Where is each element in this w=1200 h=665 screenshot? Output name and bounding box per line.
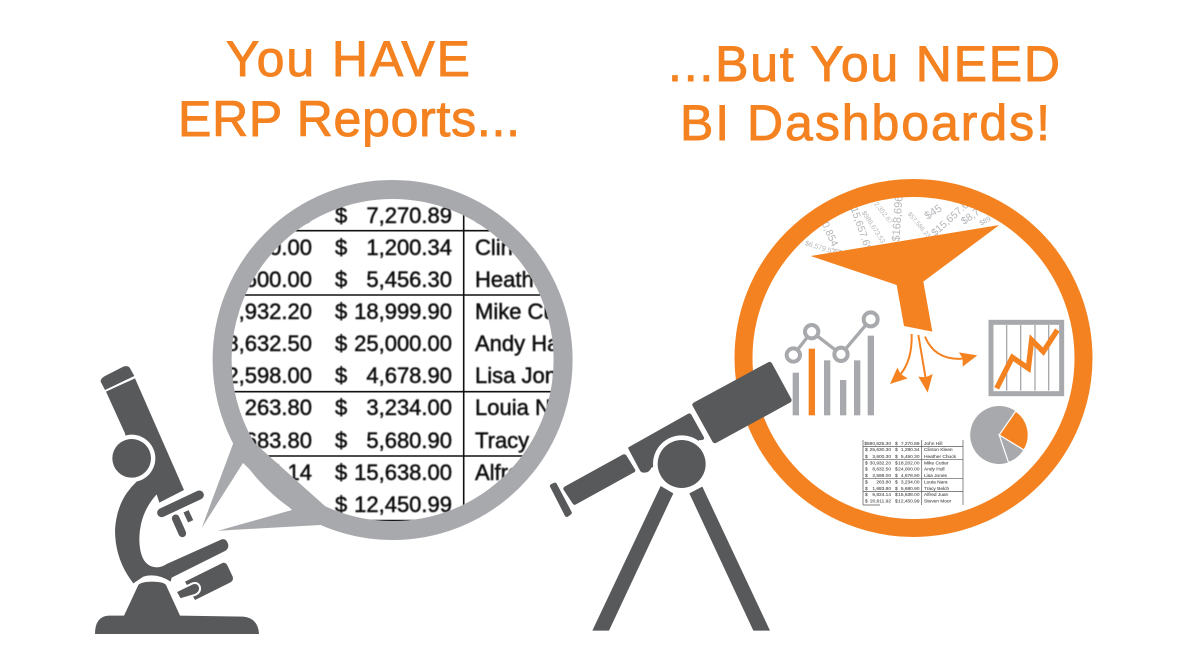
stage control pin [176,583,200,599]
dollar signs: $ [335,203,347,228]
small report table: Tracy Belch [924,486,949,492]
nosepiece [162,495,199,513]
BI dashboard circle contents [744,188,1084,528]
second amounts column: 1,200.34 [366,235,452,260]
first amounts column: 3,600.00 [226,267,312,292]
title: right heading [668,36,1060,151]
small report table: $ [895,447,898,453]
dollar signs: $ [335,460,347,485]
small report table: 18,202.00 [898,460,920,466]
magnified ERP report table [232,206,554,521]
eyepiece cap [101,366,134,390]
small report table: $ [865,454,868,460]
scattered numbers: $6,579.53 [804,240,836,256]
line chart box [991,322,1062,394]
small report table: $ [895,454,898,460]
table rules [234,215,551,521]
dollar signs: $ [335,331,347,356]
small report table: $ [865,460,868,466]
names column: Heather Chuck [475,267,623,292]
small report table: 3,600.30 [872,454,891,460]
pivot [658,440,706,488]
first amounts column: 25,630.00 [214,235,312,260]
second amounts column: 18,999.90 [354,299,452,324]
second amounts column [354,203,452,517]
names column: Andy Hall [475,331,569,356]
middle tube [628,413,704,473]
small report table: 24,000.00 [898,467,920,473]
small report table: 15,638.00 [898,492,920,498]
first amounts column: 2,598.00 [226,363,312,388]
small report table: 1,280.34 [901,447,920,453]
scattered numbers: 10,854.48 [817,215,845,262]
first amounts column: 20,611.92 [216,492,312,517]
first amounts column: 1,683.80 [226,428,312,453]
small report table: $ [895,473,898,479]
names column: John Hill [475,203,559,228]
small report table: $ [895,492,898,498]
rear tube [563,454,635,505]
small report table: 7,270.89 [901,441,920,447]
title: left heading [178,31,520,147]
second amounts column: 15,638.00 [354,460,452,485]
small report table: $ [865,486,868,492]
dollar signs: $ [335,267,347,292]
scattered numbers: $986,673.53 [860,210,886,245]
small report table: Mike Cutter [924,460,949,466]
dollar signs: $ [335,363,347,388]
small report table: $ [865,447,868,453]
small report table: $ [865,467,868,473]
small report table: John Hill [924,441,942,447]
magnifier bubble [202,190,563,531]
first amounts column: 263.80 [245,395,312,420]
small report table: 6,824.14 [872,492,891,498]
small report table: $ [895,441,898,447]
scattered numbers: $89 [979,216,992,227]
small report table: 5,450.30 [901,454,920,460]
first amounts column: 30,932.20 [214,299,312,324]
small report table: 3,234.00 [901,480,920,486]
small report table: Andy Hull [924,467,945,473]
pivot halo [653,435,710,493]
title: right heading: BI Dashboards! [680,95,1050,151]
small report table: $580,525.30 [864,441,891,447]
second amounts column: 4,678.90 [366,363,452,388]
dollar signs: $ [335,299,347,324]
base [95,582,259,634]
names column: Louia Nara [475,395,583,420]
small report table: 1,683.80 [872,486,891,492]
small report table: 8,632.50 [872,467,891,473]
small report table: $ [865,473,868,479]
small report table: $ [865,498,868,504]
small report table: 2,598.00 [872,473,891,479]
small report table: Lisa Jones [924,473,948,479]
small report table: 20,611.92 [870,498,891,504]
first amounts column [232,221,312,482]
stage control block [185,563,233,600]
small report table: Louia Nara [924,480,948,486]
small report table: 5,680.90 [901,486,920,492]
small report table: 30,932.20 [870,460,891,466]
small report table: $ [865,492,868,498]
small report table: 263.80 [876,480,891,486]
dollar signs: $ [335,395,347,420]
small report table [863,440,963,505]
second amounts column: 12,450.99 [354,492,452,517]
funnel [811,225,999,332]
second amounts column: 7,270.89 [366,203,452,228]
dollar signs: $ [335,492,347,517]
names column: Tracy Belch [475,428,590,453]
dollar signs: $ [335,235,347,260]
objective lenses [176,518,182,533]
tube, arm and stage [106,378,228,583]
scattered numbers: 2,352.67 [872,201,894,226]
dollar signs: $ [335,428,347,453]
small report table: $ [895,467,898,473]
tripod left leg [592,486,673,631]
small report table: $ [865,480,868,486]
dollar signs [335,203,347,517]
title: right heading: ...But You NEED [668,36,1060,92]
small report table: $ [895,498,898,504]
small report table: $ [895,460,898,466]
second amounts column: 5,680.90 [366,428,452,453]
first amounts column: 6,824.14 [226,460,312,485]
scattered numbers: $168,696 [890,195,906,242]
scattered numbers: $8,765 [959,200,992,227]
bar and line chart [787,312,878,415]
scattered numbers: 15,657.69 [848,206,873,253]
names column: Steven Moor [475,492,600,517]
title: left heading: ERP Reports... [178,91,520,147]
small report table: 12,450.99 [898,498,920,504]
icon: microscope [95,366,259,634]
small report table: Alfred Juan [924,492,949,498]
pie chart [970,406,1028,464]
small report table: 4,678.90 [901,473,920,479]
orange ring [744,188,1084,528]
small report table: Steven Moor [924,498,952,504]
first amounts column: 8,632.50 [226,331,312,356]
names column: Clinton Kleen [475,235,606,260]
small report table: 25,630.30 [870,447,891,453]
small report table: Heather Chuck [924,454,957,460]
eyepiece [550,483,572,517]
names column: Lisa Jones [475,363,580,388]
first amounts column: 580,525.30 [202,203,312,228]
focus knob [108,435,155,482]
second amounts column: 5,456.30 [366,267,452,292]
title: left heading: You HAVE [226,31,470,87]
names column: Alfred Juan [475,460,586,485]
second amounts column: 3,234.00 [366,395,452,420]
icon: telescope [550,362,792,631]
scattered numbers: $57,586.23 [906,211,932,240]
names column: Mike Cutter [475,299,587,324]
bubble pointer [202,430,335,531]
small report table: $ [895,486,898,492]
names column [474,222,554,482]
tripod right leg [689,487,770,631]
scattered numbers [805,198,990,253]
front barrel [692,362,792,443]
second amounts column: 25,000.00 [354,331,452,356]
scattered numbers: $15,657.69 [930,196,976,239]
arrows from funnel [890,334,977,393]
scattered numbers: $45 [922,202,944,223]
small report table: Clinton Kleen [924,447,953,453]
small report table: $ [895,480,898,486]
